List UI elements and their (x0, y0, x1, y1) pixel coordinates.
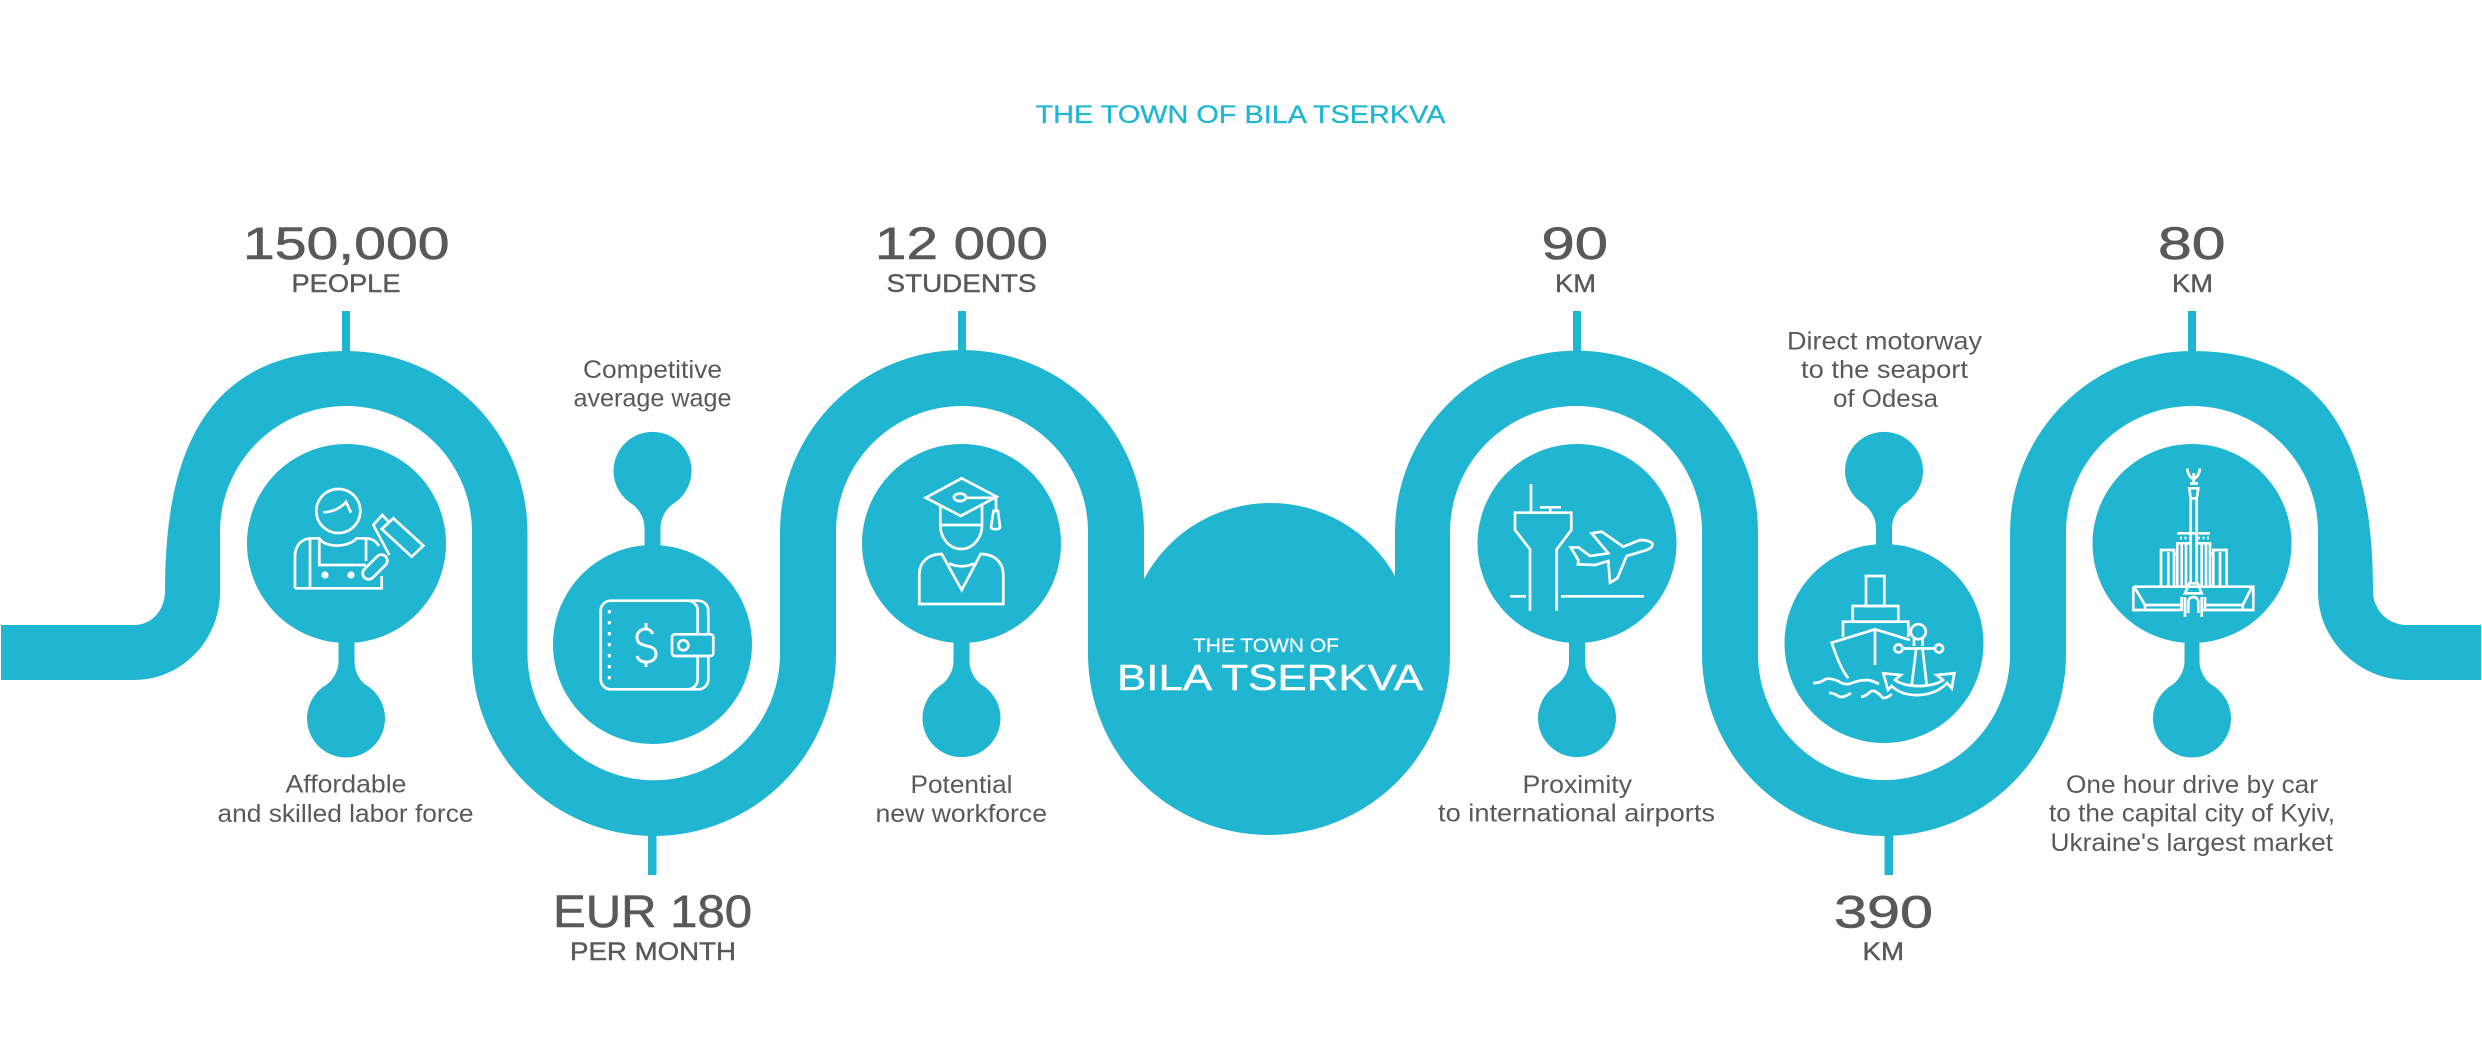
stat: 150,000 people (243, 218, 450, 298)
stat: 90 km: KM (1555, 270, 1596, 298)
caption: airports (1438, 771, 1715, 828)
stat stems (342, 311, 2196, 875)
icon: ship and anchor (1813, 576, 1954, 698)
stat: 80 km: 80 (2158, 218, 2226, 269)
icon: Independence Monument (2133, 468, 2253, 617)
title: THE TOWN OF BILA TSERKVA (1036, 101, 1446, 129)
stat: 12 000 students (875, 218, 1048, 298)
icon: graduate (919, 478, 1003, 604)
node: potential workforce (862, 444, 1061, 757)
caption: seaport: to the seaport (1801, 356, 1968, 384)
caption: workforce: new workforce (876, 800, 1047, 828)
node: labor force (247, 444, 446, 757)
stat: 12 000 students: STUDENTS (886, 270, 1036, 298)
stat: 12 000 students: 12 000 (875, 218, 1048, 269)
caption: average wage (574, 356, 732, 412)
caption: capital city: Ukraine's largest market (2050, 829, 2333, 857)
caption: labor force (218, 770, 474, 828)
winding track with central hub (1, 350, 2481, 836)
caption: average wage: average wage (574, 384, 732, 412)
caption: capital city (2049, 771, 2335, 857)
node: airports (1478, 444, 1676, 757)
stat: 90 km (1542, 218, 1608, 298)
stat: 390 km: KM (1862, 938, 1904, 966)
stat: EUR 180 per month: EUR 180 (553, 886, 752, 937)
hub label: BILA TSERKVA (1117, 657, 1423, 698)
stat: 390 km (1834, 886, 1933, 966)
hub label: THE TOWN OF (1193, 635, 1339, 657)
caption: airports: Proximity (1522, 771, 1633, 799)
caption: workforce: Potential (910, 771, 1012, 799)
caption: airports: to international airports (1438, 800, 1715, 828)
caption: seaport (1787, 328, 1983, 413)
stat: EUR 180 per month (553, 886, 752, 966)
caption: average wage: Competitive (583, 356, 722, 384)
caption: labor force: Affordable (286, 770, 406, 798)
caption: labor force: and skilled labor force (218, 800, 474, 828)
icon: wallet with dollar (601, 601, 713, 689)
node: capital city (2092, 444, 2292, 757)
hub label (1117, 635, 1423, 698)
node: average wage (553, 432, 752, 744)
stat: 80 km: KM (2172, 270, 2213, 298)
stat: 390 km: 390 (1834, 886, 1933, 938)
icon: painter with roller (295, 489, 423, 588)
stat: EUR 180 per month: PER MONTH (570, 938, 736, 966)
stat: 90 km: 90 (1542, 218, 1608, 269)
caption: workforce (876, 771, 1047, 828)
stat: 150,000 people: PEOPLE (292, 270, 400, 298)
icon: control tower and plane (1510, 484, 1652, 611)
caption: seaport: of Odesa (1833, 385, 1938, 413)
stat: 80 km (2158, 218, 2226, 298)
node: seaport (1784, 432, 1984, 743)
stat: 150,000 people: 150,000 (243, 218, 450, 269)
caption: capital city: One hour drive by car (2066, 771, 2318, 799)
caption: seaport: Direct motorway (1787, 328, 1983, 356)
caption: capital city: to the capital city of Kyiv, (2049, 800, 2335, 828)
